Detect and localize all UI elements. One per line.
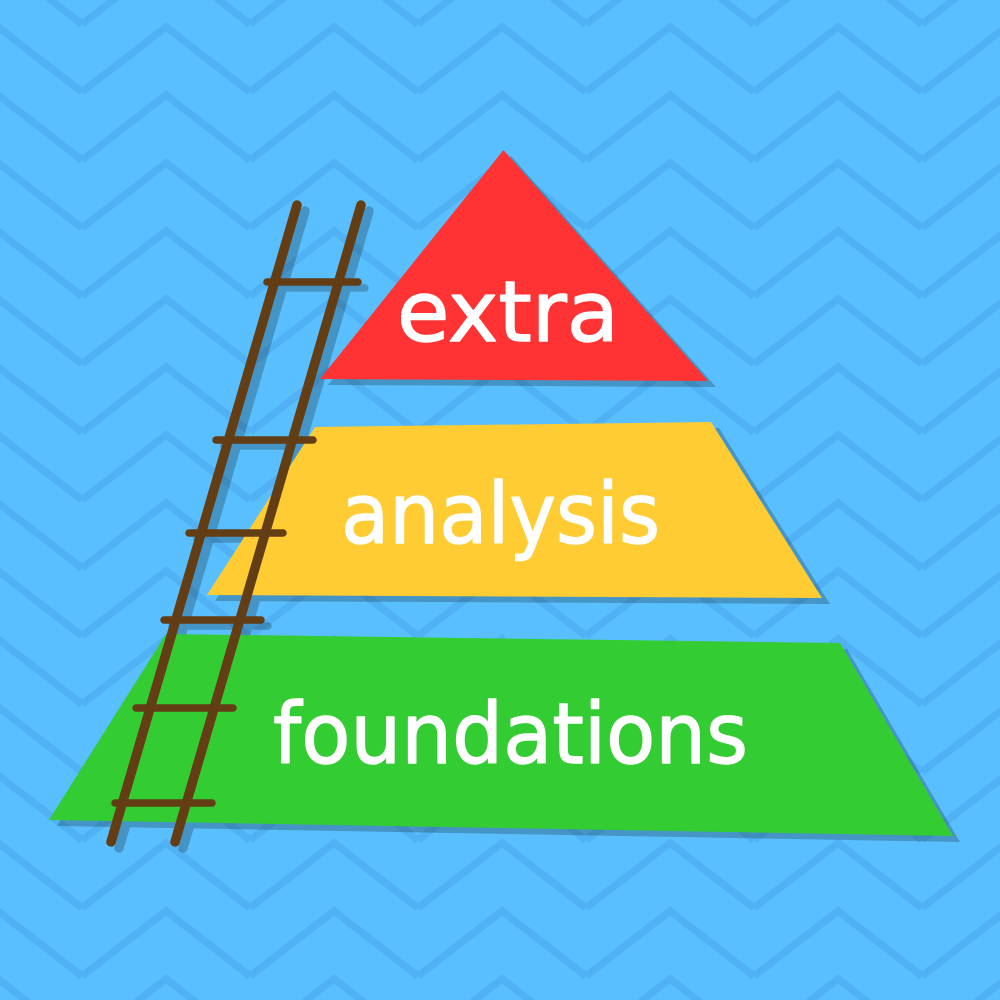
panel: analysis layer: [207, 422, 822, 598]
label: extra: extra: [397, 263, 619, 361]
label: foundations: foundations: [273, 685, 748, 783]
shadows of ladder and pyramid layers: [57, 156, 960, 848]
label: analysis: analysis: [341, 465, 660, 563]
icon: ladder: [111, 205, 361, 842]
panel: extra layer: [320, 150, 708, 381]
panel: foundations layer: [49, 634, 953, 836]
